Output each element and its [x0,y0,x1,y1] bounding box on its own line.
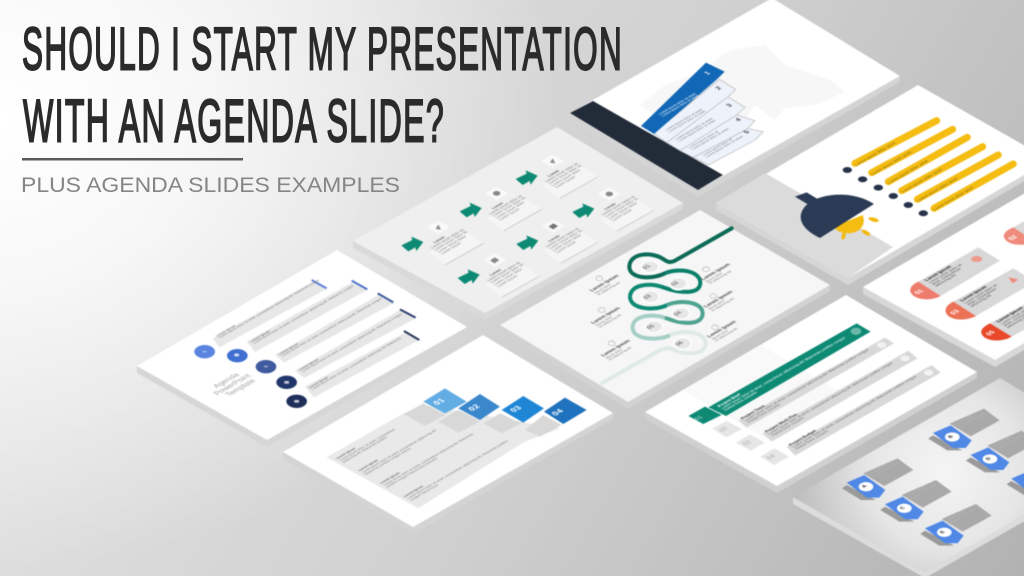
row 03: massa fusce posuere [770,416,805,437]
card 6: Lorem ipsum dolor [493,267,524,286]
card 5 [516,219,598,263]
icon circles [194,345,307,408]
tag 01: amet, consectetuer [931,267,963,286]
row 03: Lorem ipsum dolor sit amet, consectetuer adipiscing elit. Maecenas porttitor congue [767,362,894,435]
blue tile 03 [502,396,544,423]
card 1: Lorem ipsum dolor sit [433,230,469,251]
slide: world map agenda with numbered tabs [570,0,900,197]
card 6: Lorem ipsum dolor sit [486,261,522,282]
tab 3: 3 [725,103,735,108]
tag 03: Lorem ipsum dolor sit [963,283,999,304]
yellow bars and number dots: Lorem ipsum dolor amet [900,167,944,193]
dark band [570,101,723,190]
card 2: Lorem ipsum dolor sit [491,196,527,217]
tag C [880,480,952,522]
gray text panel: Lorem Ipsum [402,485,425,498]
label: PowerPoint: PowerPoint [211,372,254,397]
card 4 [572,187,654,231]
card 6 [458,253,540,297]
tag F [1007,454,1024,496]
row 02: 02 [718,426,730,433]
side labels: Lorem Ipsum [700,263,732,281]
card 5: Lorem ipsum dolor sit [548,229,584,250]
tab 4: Lorem ipsum dolor sit [687,130,719,149]
card 4: Lorem ipsum dolor [607,201,639,220]
gray text panel: Lorem ipsum dolor sit amet, consectetuer adipiscing elit [360,429,437,474]
tag E: Lorem ipsum dolor [950,507,979,524]
label: Agenda: Agenda [211,371,242,389]
row 04: Project Budget [787,429,818,446]
side labels: sit adipiscing elit [607,346,633,361]
card 6: Lorem ipsum dolor sit [489,263,525,284]
side labels: sit adipiscing elit [597,314,623,328]
numbered nodes: 03 [643,294,653,300]
numbered nodes: 02 [670,281,681,287]
tag C: C [899,506,908,511]
tab 1 blue: Lorem ipsum dolor sit amet [660,94,700,117]
row 04: 04 [765,453,778,461]
tag A: A [861,484,869,489]
side labels: Lorem Ipsum [590,306,622,325]
gray agenda bars: Lorem ipsum dolor sit amet, consectetuer adipiscing elit. Maecenas [310,337,403,390]
tag A: Lorem Ipsum [867,464,888,476]
gray agenda bars [213,277,419,397]
blue tile 01: 01 [431,397,448,406]
tag 01: 01 [913,288,926,296]
row 04 [760,365,941,465]
card 6: Lorem ipsum [496,274,519,288]
side labels: Lorem Ipsum [600,339,632,358]
tab 3: Lorem ipsum dolor sit amet [674,118,714,140]
row 04: Lorem ipsum dolor sit amet, consectetuer adipiscing elit. Maecenas porttitor congue [791,375,918,448]
tab 4: Lorem ipsum dolor sit amet [690,128,730,151]
side labels: Ipsum dolor [604,348,624,359]
teal header bar: massa fusce posuere [723,391,758,411]
tab 1 blue: 1 [703,70,713,76]
card 3: Lorem ipsum [554,175,577,189]
card 6: Lorem [489,268,503,276]
card 5: Lorem ipsum [555,240,577,254]
snake path [602,228,732,383]
tag B: B [947,434,955,439]
tag B: Lorem Ipsum [954,414,975,426]
gray agenda bars: Lorem ipsum dolor sit amet, consectetuer adipiscing elit. Maecenas congue [252,285,355,344]
row 03: 03 [741,439,754,447]
yellow bars and number dots: Lorem ipsum dolor amet [915,176,960,202]
numbered nodes: 01 [642,264,653,270]
tab 1 blue: Lorem ipsum dolor sit amet [657,93,697,115]
row 02 [712,338,894,437]
tag 03: amet, consectetuer [966,287,998,306]
tab 2: Lorem ipsum dolor sit amet [664,108,704,131]
card 3 [516,154,598,198]
tag E: E [939,530,947,535]
blue tile 03: 03 [508,404,524,414]
blue tile 02 [458,394,500,420]
tag 03: Lorem Ipsum [959,285,988,302]
yellow bars and number dots: Lorem ipsum dolor amet [869,150,914,176]
row 02: Lorem ipsum dolor sit amet, consectetuer adipiscing elit. Maecenas porttitor congue [743,348,870,422]
gray agenda bars: Lorem Ipsum [249,330,271,343]
divider rule [22,158,243,160]
yellow bars and number dots: Lorem ipsum dolor amet [931,185,976,211]
gray text panel: Lorem ipsum dolor sit amet, consectetuer adipiscing elit. Maecenas [382,433,475,486]
tab 5 [693,128,763,165]
side labels: Lorem Ipsum [703,290,735,309]
tag D: D [985,456,993,461]
tag 03: adipiscing elit [969,294,993,308]
card 5: Lorem ipsum dolor [551,233,583,252]
tab 1 blue [641,63,725,134]
gray text panel: Lorem Ipsum [379,472,401,484]
tag 05: 05 [985,330,997,337]
gray agenda bars: Lorem Ipsum [307,376,330,389]
gray agenda bars: Lorem Ipsum [215,324,237,337]
gray text panel: Lorem Ipsum [335,447,357,460]
tag A [842,458,913,500]
card 3: Lorem [547,169,561,177]
card 1: Lorem ipsum dolor sit [430,228,466,249]
gray lower band [716,173,893,278]
gray text panel: Lorem ipsum dolor sit amet, consectetuer [338,428,397,462]
row 02: Project Team [739,404,766,420]
tag C: Lorem Ipsum [906,485,927,497]
tag 05: Lorem Ipsum [995,306,1024,323]
numbered nodes: 05 [646,324,657,330]
card 2: Lorem ipsum dolor sit [488,194,524,215]
gray agenda bars: Lorem ipsum dolor sit amet, consectetuer adipiscing elit. Maecenas congue [300,313,403,373]
tab 2 [653,79,736,143]
card 1: Lorem [432,236,447,244]
card 4: Lorem ipsum [611,208,633,222]
card 4: Lorem [603,202,618,210]
teal header bar: Lorem ipsum dolor sit amet, consectetuer adipiscing elit. Maecenas porttitor congue [720,336,847,410]
card 5: Lorem [547,234,562,242]
tag 03 [946,268,1024,320]
tag 01: adipiscing elit [934,273,958,287]
yellow bars and number dots: Lorem ipsum dolor amet [886,159,930,184]
side labels: sit adipiscing elit [710,297,735,312]
slide: four blue stair tiles 01-04 [283,335,613,534]
tag D: Lorem Ipsum [991,436,1012,448]
gray agenda bars: Lorem Ipsum [277,343,300,355]
tag 03: 03 [949,309,962,316]
side labels: sit adipiscing elit [596,281,621,296]
card 5: Lorem ipsum dolor sit [545,227,581,248]
gray text panel: Lorem ipsum dolor sit amet, consectetuer adipiscing elit. Maecenas porttitor [406,439,510,500]
side labels: sit adipiscing elit [713,327,739,342]
tab 4 [680,113,755,157]
slide: blue lettered tags on gray gradient [793,378,1024,576]
gray text panel: porttitor congue massa fusce posuere [385,457,439,488]
numbered nodes: 06 [675,341,685,347]
card 2 [460,187,542,231]
tag A: Lorem ipsum dolor [871,461,900,478]
tag E: Lorem Ipsum [946,509,967,521]
blue tile 01 [423,388,467,413]
icon: lamp [795,192,879,240]
slide: spotlight lamp agenda with yellow bars [716,85,1024,285]
numbered nodes: 04 [673,310,684,317]
blue tile 04: 04 [550,408,566,417]
card 4: Lorem ipsum dolor sit [601,195,637,216]
side labels: Lorem Ipsum [706,320,738,339]
tag 01 [910,247,1000,299]
teal header bar [688,323,871,424]
card 2: Lorem ipsum [498,208,521,221]
gray text panel: adipiscing elit. Maecenas porttitor [341,435,390,463]
side labels: sit adipiscing elit [707,270,733,285]
card 1 [401,221,483,265]
card 1: Lorem ipsum dolor [436,235,468,253]
title [22,16,623,154]
tab 2: 2 [714,85,724,91]
tag B: Lorem ipsum dolor [958,412,987,428]
card 3: Lorem ipsum dolor [551,168,582,187]
card 3: Lorem ipsum dolor sit [544,162,580,183]
gray text panel [327,405,560,508]
side labels: Ipsum dolor [710,329,730,340]
tab 3: Lorem ipsum dolor sit amet [677,119,717,142]
gray agenda bars: Lorem ipsum dolor sit amet, consectetuer adipiscing elit. Maecenas congue [217,279,321,339]
faint world map [640,45,845,150]
gray agenda bars: Lorem Ipsum [297,358,320,371]
row 02: massa fusce posuere [746,403,781,423]
tab 4: 4 [734,117,744,123]
tab 5: Lorem ipsum dolor sit amet [704,135,744,158]
title line 2: WITH AN AGENDA SLIDE? [23,88,445,154]
tab 5: Lorem ipsum dolor sit [701,138,733,156]
tag C: Lorem ipsum dolor [910,483,939,500]
gray text panel: Lorem Ipsum [357,459,379,472]
side labels: Ipsum dolor [704,271,724,283]
side labels: Ipsum dolor [594,315,614,327]
tab 5: 5 [742,129,752,135]
teal header bar: Project Brief [716,392,742,408]
tag E [920,504,992,546]
slide: project brief list with teal bar [645,295,977,493]
blue tile 02: 02 [466,403,483,412]
side labels: Lorem Ipsum [589,274,621,293]
card 3: Lorem ipsum dolor sit [547,164,583,185]
blue tile 04 [544,398,587,424]
tag 01: Lorem ipsum dolor sit [928,263,964,284]
gray tiles [404,403,562,437]
tag 05 [981,290,1024,340]
tag 02 [1004,193,1024,245]
tag B [928,409,1000,450]
card 2: Lorem [491,202,505,210]
tag 01: Lorem Ipsum [923,265,953,282]
card 2: Lorem ipsum dolor [495,201,526,219]
row 03 [736,351,917,451]
gray text panel: congue massa fusce [409,484,440,501]
yellow bars and number dots: Lorem ipsum dolor amet [853,141,898,166]
row 04: massa fusce posuere [794,430,829,450]
row 03: Project Work Plan [763,412,799,433]
side labels: Ipsum dolor [707,299,727,310]
slide: coral rounded tags list [863,170,1024,367]
subtitle: PLUS AGENDA SLIDES EXAMPLES [21,173,400,197]
gray text panel: Maecenas porttitor congue massa [363,447,412,475]
tab 3 [667,95,745,151]
card 4: Lorem ipsum dolor sit [604,197,640,218]
teal header bar: 01 [693,414,705,422]
slide: teal snake path with six nodes [500,210,830,409]
tab 2: Lorem ipsum dolor sit amet [667,110,707,133]
tag D [966,431,1024,472]
numbered nodes [640,259,693,351]
slide: teal arrow cards on gray [353,127,683,320]
card 1: Lorem ipsum [440,242,462,255]
label: Template: Template [223,377,258,398]
side labels: Ipsum dolor [593,283,613,294]
slide: agenda PowerPoint template with blue circles [137,250,467,447]
yellow bars and number dots [843,121,1013,216]
tag 02: 02 [1007,234,1020,242]
tag D: Lorem ipsum dolor [995,434,1024,450]
side labels [589,262,744,361]
gray agenda bars: Lorem ipsum dolor sit amet, consectetuer adipiscing elit. Maecenas congue [280,297,383,357]
